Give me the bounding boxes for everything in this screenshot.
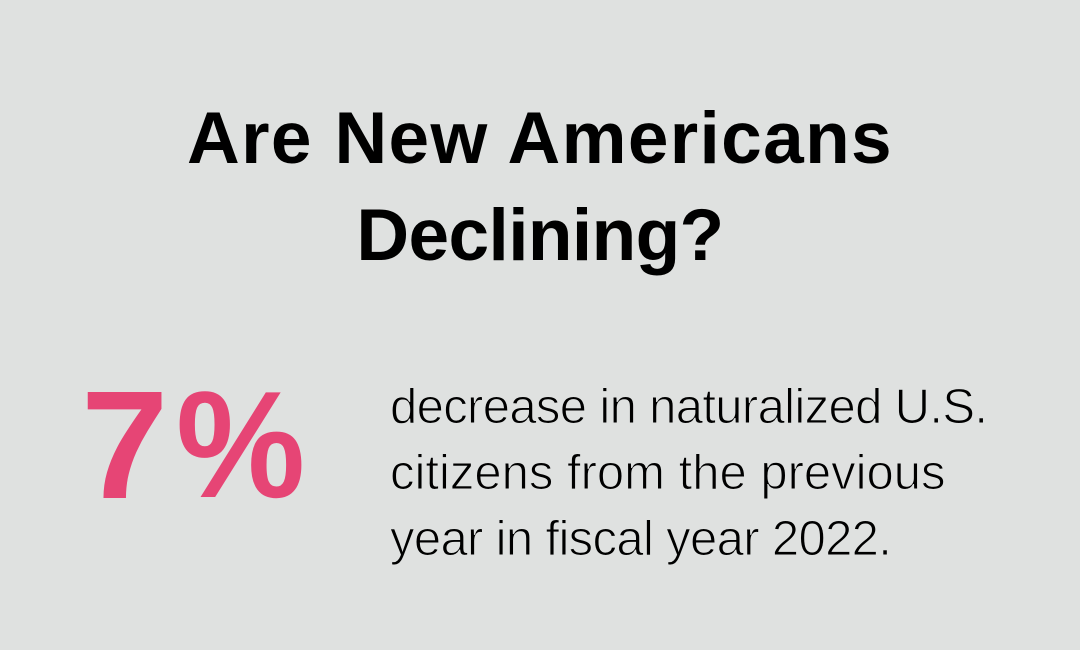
description text: decrease in naturalized U.S.: [390, 380, 987, 434]
description text: [390, 380, 987, 566]
big stat: 7%: %: [176, 360, 305, 530]
big stat: 7%: [81, 359, 305, 531]
description text: year in fiscal year 2022.: [390, 512, 891, 566]
description text: citizens from the previous: [390, 446, 946, 500]
title: [187, 98, 893, 276]
big stat: 7%: 7: [81, 359, 168, 531]
title: Declining?: [356, 195, 724, 276]
title: Are New Americans: [187, 98, 893, 179]
